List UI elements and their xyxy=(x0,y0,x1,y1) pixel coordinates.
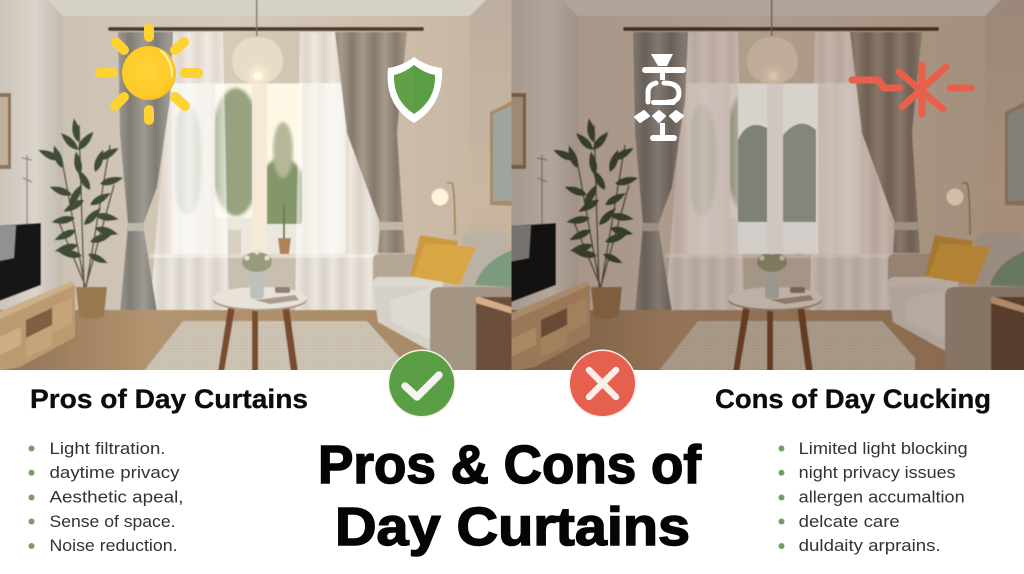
sheer curtain right xyxy=(295,32,381,312)
floor lamp xyxy=(432,183,455,235)
floor xyxy=(0,310,524,372)
framed art right xyxy=(490,97,520,206)
ceiling xyxy=(45,0,488,16)
main title: Day Curtains xyxy=(335,497,690,557)
vase with flowers xyxy=(242,250,272,299)
dimming overlay xyxy=(511,0,1024,370)
window xyxy=(150,83,375,310)
list: cons xyxy=(778,440,968,555)
list: pros: Light filtration. xyxy=(50,440,166,458)
gray curtain right xyxy=(335,32,407,253)
gray curtain left xyxy=(118,32,173,312)
list: cons: Limited light blocking xyxy=(799,440,968,458)
icon: sun xyxy=(100,28,198,120)
main title xyxy=(318,435,702,557)
sofa xyxy=(373,232,520,372)
panel: cons photo of dim living room xyxy=(509,0,1024,372)
dim window panes with gray trees xyxy=(738,84,818,254)
icon: shield xyxy=(388,57,442,123)
panel: pros photo of daytime living room xyxy=(0,0,526,372)
heading: cons: Cons of Day Cucking xyxy=(715,384,991,414)
rug xyxy=(143,321,400,372)
icon: white abstract xyxy=(635,54,686,141)
list: cons: delcate care xyxy=(799,513,900,531)
right wall xyxy=(470,0,520,330)
curtain rod xyxy=(108,27,424,31)
left wall xyxy=(0,0,63,330)
wall stand xyxy=(22,155,32,225)
TV unit xyxy=(0,281,75,372)
list: pros: Noise reduction. xyxy=(50,537,178,555)
back wall xyxy=(0,0,524,330)
icon: green check badge xyxy=(388,350,456,418)
list: pros: daytime privacy xyxy=(50,464,180,482)
coffee table xyxy=(213,287,307,372)
icon: red cross badge xyxy=(568,350,636,418)
pendant lamp xyxy=(232,0,283,89)
sheer curtain left xyxy=(150,32,229,311)
heading: pros: Pros of Day Curtains xyxy=(30,384,308,414)
potted plant xyxy=(37,118,124,319)
list: cons: allergen accumaltion xyxy=(799,488,965,506)
icon: red burst xyxy=(852,65,971,114)
list: cons: duldaity arprains. xyxy=(799,537,941,555)
list: pros: Aesthetic apeal, xyxy=(50,488,184,506)
framed art left xyxy=(0,93,11,169)
list: pros: Sense of space. xyxy=(50,513,176,531)
list: pros xyxy=(28,440,184,555)
side table xyxy=(476,297,526,372)
main title: Pros & Cons of xyxy=(318,435,702,495)
television xyxy=(0,223,41,303)
room scene, shifted xyxy=(509,0,1024,372)
list: cons: night privacy issues xyxy=(799,464,956,482)
